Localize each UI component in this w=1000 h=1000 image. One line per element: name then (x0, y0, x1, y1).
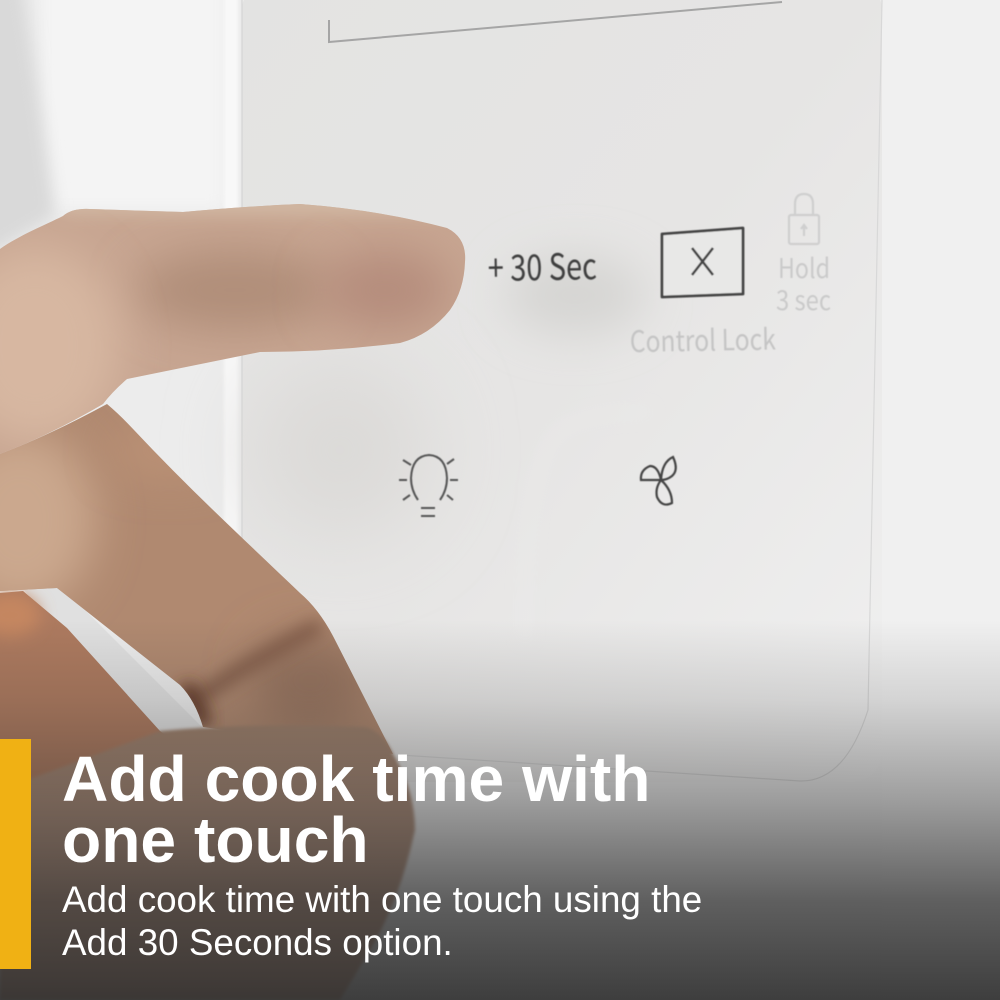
index finger (0, 204, 466, 454)
panel surface (242, 0, 882, 782)
button label: +30 Sec: + 30 Sec (487, 238, 597, 292)
thumb (0, 725, 415, 1000)
title: Add cook time with (62, 743, 650, 815)
label: hold 3 sec: 3 sec (776, 279, 831, 318)
accent bar (0, 739, 31, 969)
icon: light bulb (399, 455, 458, 516)
second finger (0, 404, 393, 754)
third finger (0, 591, 200, 830)
body text: Add cook time with one touch using the (62, 879, 702, 920)
photo: hand with pointing finger (0, 190, 480, 1000)
body text: Add 30 Seconds option. (62, 922, 453, 963)
button glow (505, 255, 645, 335)
title (62, 743, 650, 876)
icon: control lock X button (662, 228, 743, 297)
body text (62, 879, 702, 963)
icon: fan (641, 457, 676, 505)
label: hold 3 sec (776, 247, 831, 318)
gap behind fingers (20, 585, 210, 740)
label: hold 3 sec: Hold (778, 247, 830, 286)
icon: padlock (789, 194, 819, 244)
title: one touch (62, 804, 369, 876)
label: control lock: Control Lock (629, 316, 776, 361)
